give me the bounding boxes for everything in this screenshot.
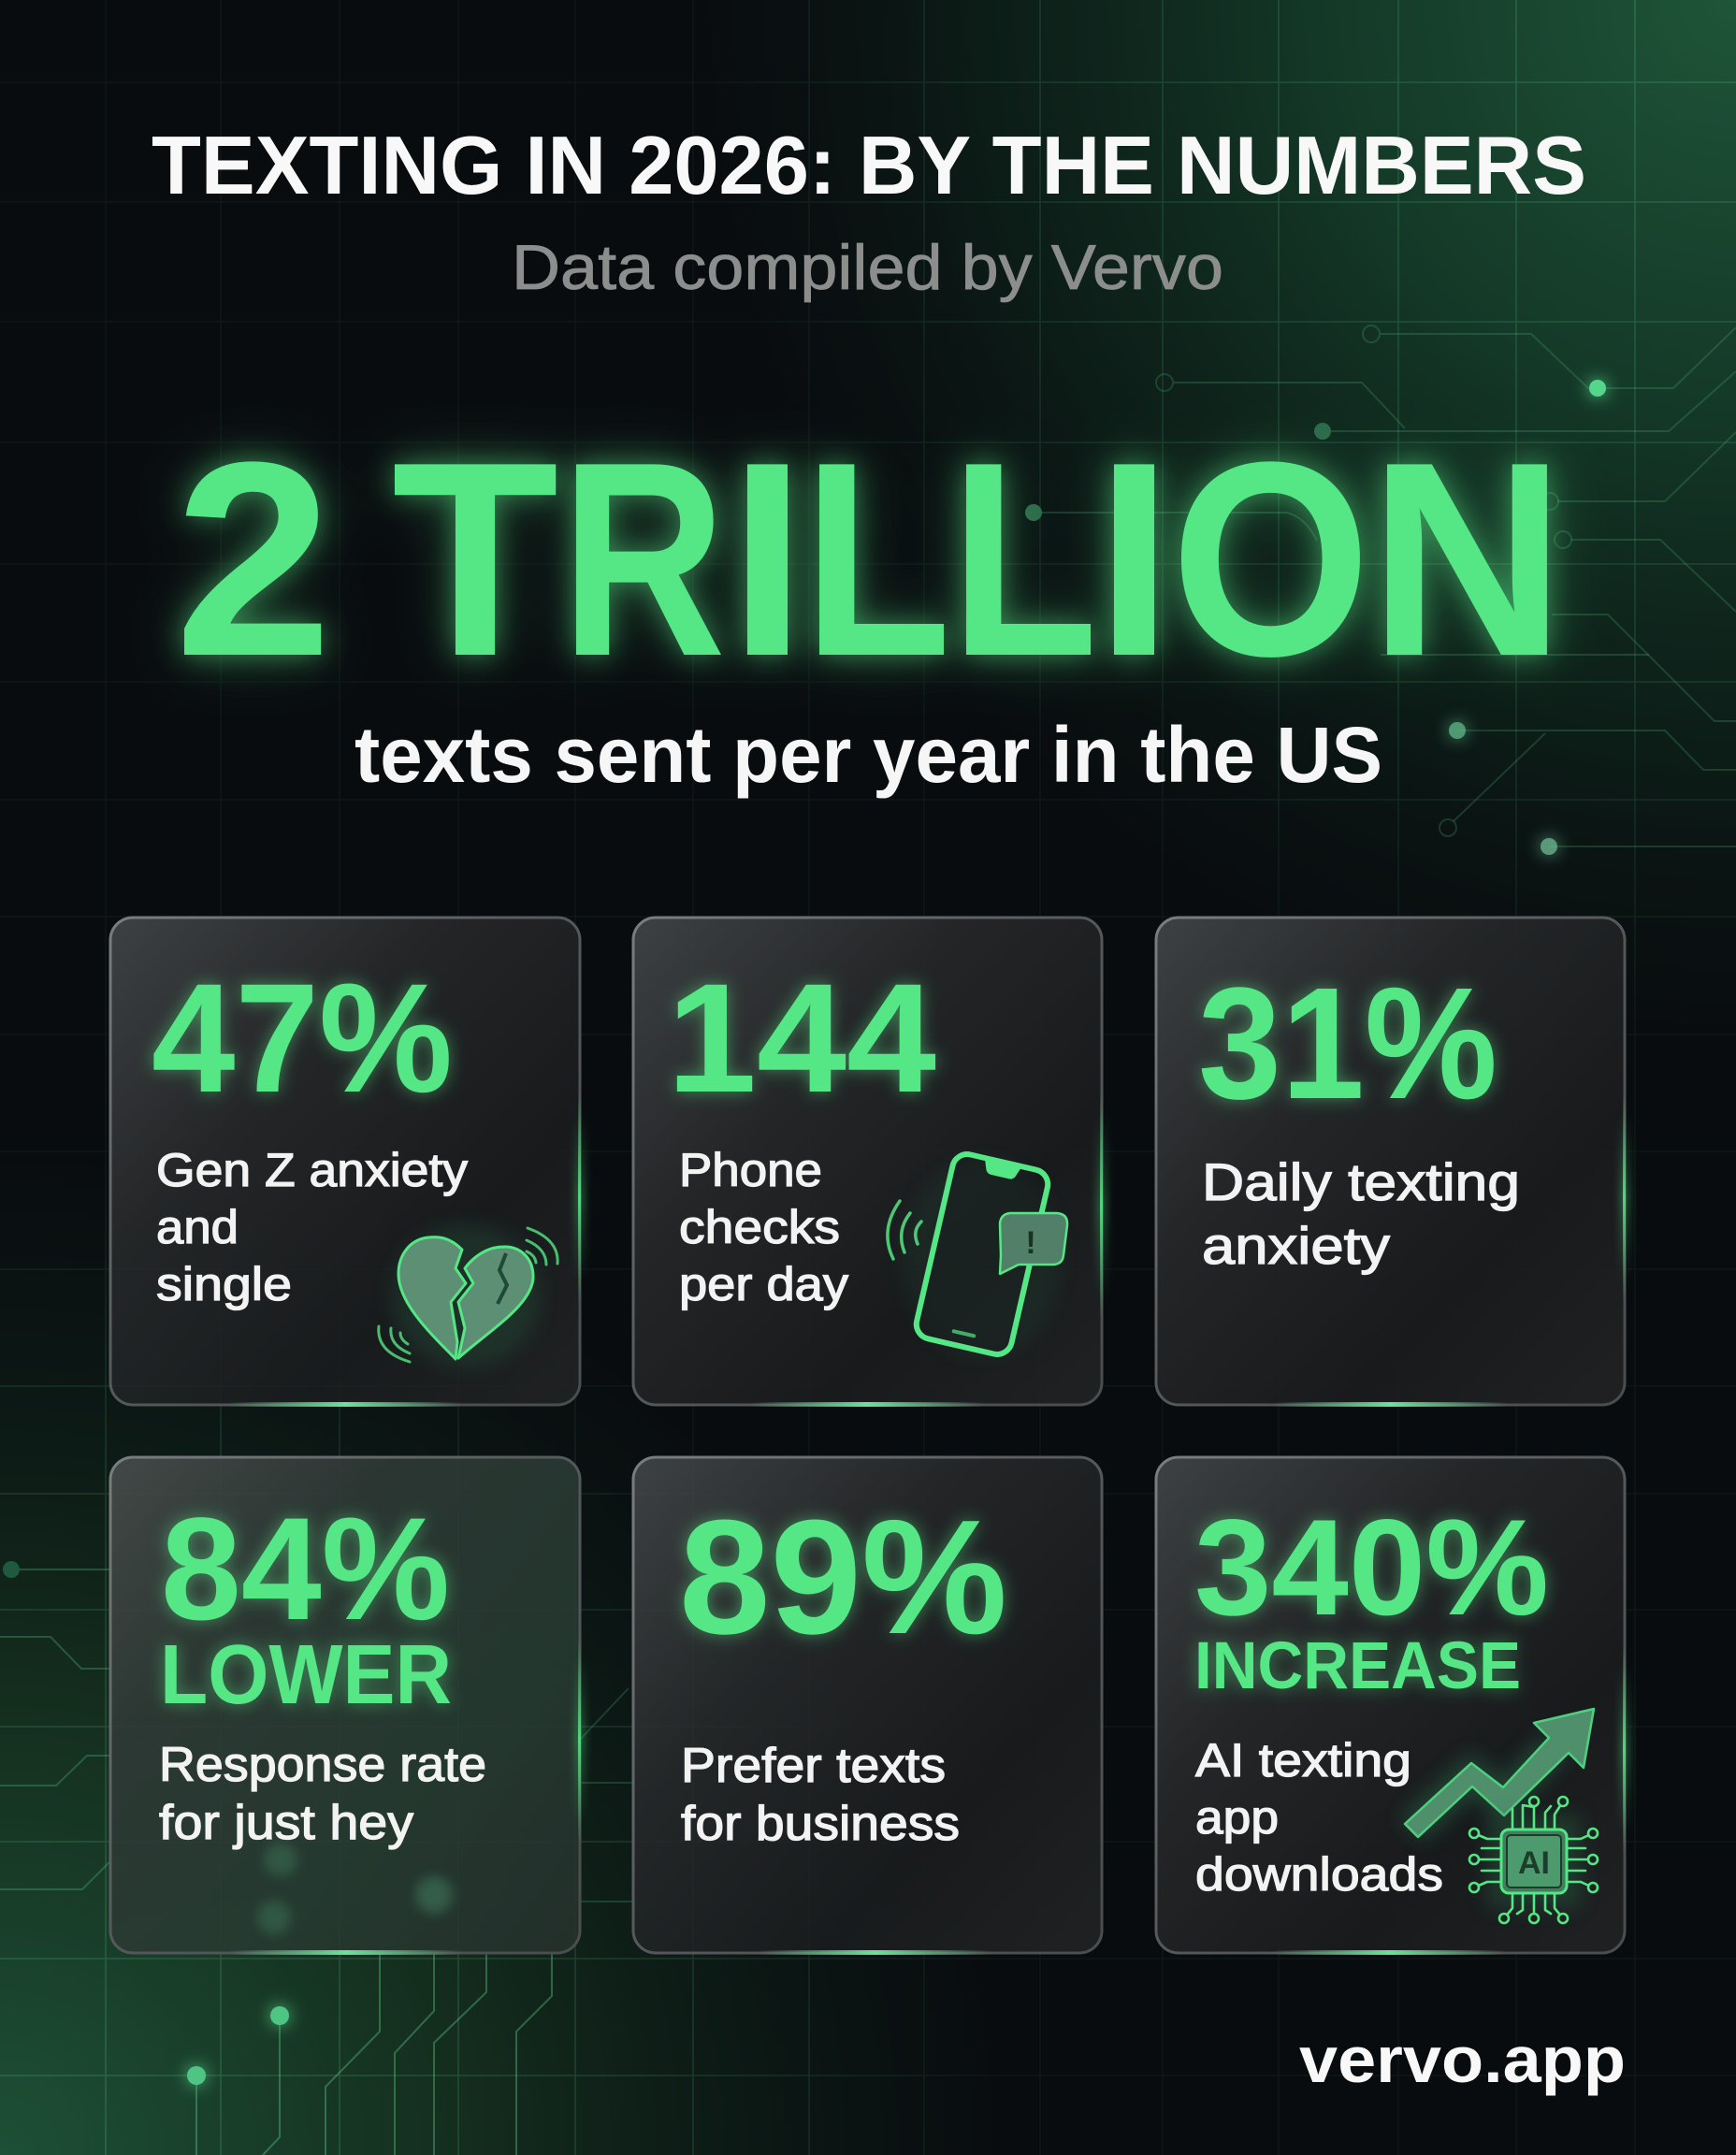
stat qualifier: lower: LOWER xyxy=(160,1628,452,1722)
stat: 340%: 340% xyxy=(1194,1491,1549,1643)
label: AI texting xyxy=(1195,1734,1411,1786)
label xyxy=(156,1144,468,1310)
circuit traces: left and bottom xyxy=(0,1561,633,2155)
panel: phone checks xyxy=(633,918,1107,1407)
label xyxy=(1195,1734,1443,1901)
label: for just hey xyxy=(159,1796,413,1850)
stat: 31%: 31% xyxy=(1198,955,1497,1133)
label: Prefer texts xyxy=(681,1739,946,1793)
label: Daily texting xyxy=(1202,1152,1520,1211)
icon: broken heart xyxy=(379,1224,557,1367)
panel: ai texting downloads xyxy=(1156,1457,1630,1955)
icon: phone with alert xyxy=(888,1151,1067,1357)
stat: 89%: 89% xyxy=(679,1485,1007,1668)
panel: daily texting anxiety xyxy=(1156,918,1630,1407)
website footer: vervo.app xyxy=(1299,2023,1626,2096)
label: Response rate xyxy=(159,1738,486,1792)
stat: 84%: 84% xyxy=(161,1488,450,1651)
label xyxy=(159,1738,486,1850)
headline number: N xyxy=(1369,404,1566,714)
headline number: R xyxy=(561,404,726,714)
stat qualifier: increase: INCREASE xyxy=(1194,1629,1521,1703)
label xyxy=(681,1739,960,1851)
label: and xyxy=(156,1201,239,1253)
headline number: 2 xyxy=(174,404,332,714)
icon: rising arrow xyxy=(1405,1709,1594,1837)
subtitle: Data compiled by Vervo xyxy=(512,232,1223,303)
label: anxiety xyxy=(1202,1216,1390,1275)
headline number: O xyxy=(1171,404,1371,714)
stat: 47%: 47% xyxy=(152,952,453,1125)
circuit traces: upper right xyxy=(1025,325,1736,846)
icon: phone with alert: ! xyxy=(1025,1225,1036,1261)
stat: 144: 144 xyxy=(667,952,936,1125)
label: downloads xyxy=(1195,1848,1443,1901)
panel: prefer texts for business xyxy=(633,1457,1102,1955)
icon: ai chip xyxy=(1469,1797,1598,1923)
label xyxy=(679,1144,848,1310)
headline number: I xyxy=(1095,404,1173,714)
headline number: T xyxy=(392,404,558,714)
label: app xyxy=(1195,1791,1279,1844)
label: for business xyxy=(681,1797,960,1851)
headline number: L xyxy=(803,404,951,714)
label: per day xyxy=(679,1258,848,1310)
glowing nodes xyxy=(187,380,1606,2085)
headline number: I xyxy=(729,404,806,714)
icon: ai chip: AI xyxy=(1518,1845,1550,1881)
headline number: L xyxy=(950,404,1098,714)
panel: response rate xyxy=(110,1457,586,1955)
label: Phone xyxy=(679,1144,822,1196)
label: checks xyxy=(679,1201,840,1253)
label xyxy=(1202,1152,1520,1275)
headline caption: texts sent per year in the US xyxy=(354,711,1382,799)
panel: gen z anxiety xyxy=(110,918,586,1407)
label: Gen Z anxiety xyxy=(156,1144,468,1196)
title: TEXTING IN 2026: BY THE NUMBERS xyxy=(152,119,1586,211)
label: single xyxy=(156,1258,292,1310)
